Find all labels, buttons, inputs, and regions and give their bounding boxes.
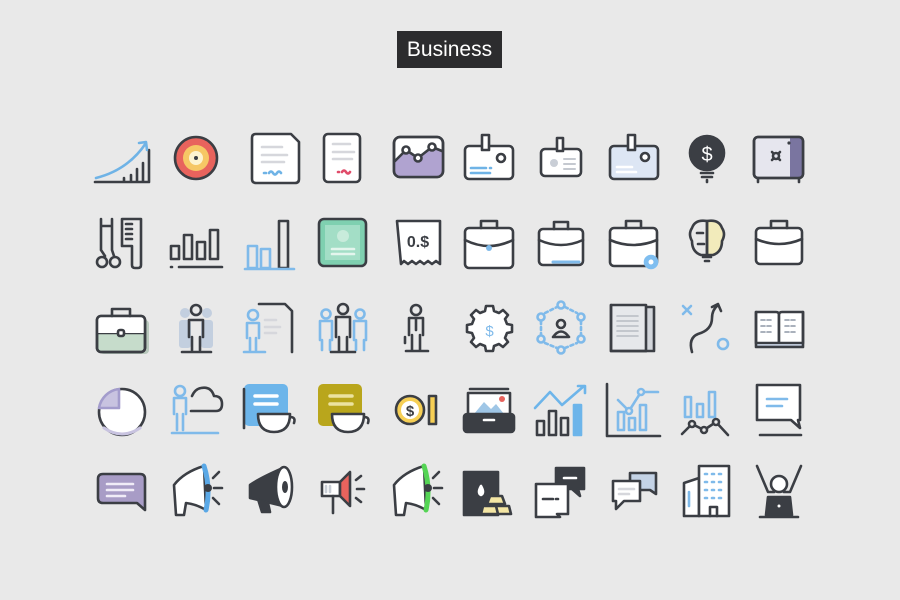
title <box>397 31 502 68</box>
icon: coin ruler: $ <box>406 403 415 420</box>
icon: olive doc cup <box>318 384 368 432</box>
icon: line bar chart <box>607 384 660 436</box>
icon: growth chart <box>95 142 149 182</box>
icon: scissors and comb <box>97 219 141 268</box>
icon: person laptop <box>757 466 801 517</box>
icon: megaphone red <box>322 472 364 513</box>
icon: bar chart blue <box>245 221 294 269</box>
icon: person with document <box>244 304 292 352</box>
icon: pie chart <box>99 389 145 435</box>
icon: briefcase green <box>97 309 149 354</box>
icon: path route <box>683 304 728 352</box>
icon: document red <box>324 134 360 182</box>
icon: gear dollar: $ <box>485 323 494 340</box>
icon: bar chart arrow <box>535 386 585 435</box>
icon: blue doc cup <box>244 384 294 432</box>
icon: area chart card <box>394 137 443 177</box>
icon: megaphone green <box>394 466 442 515</box>
icon: document blue <box>252 134 299 183</box>
icon: id card 2 <box>541 138 581 176</box>
icon: bar chart outline <box>171 230 222 267</box>
icon: photo tray <box>464 389 514 432</box>
icon: purple chat <box>98 474 145 510</box>
icon: open book <box>756 312 803 348</box>
icon: receipt <box>397 221 440 264</box>
icon: businessman <box>405 305 428 351</box>
icon: documents stack <box>611 305 654 351</box>
icon: brain <box>690 221 724 261</box>
icon: briefcase 2 <box>539 222 583 265</box>
icon: network <box>538 302 584 354</box>
icon: id card 1 <box>465 135 513 179</box>
icon: chat bubbles dark white <box>536 468 584 517</box>
icon: receipt: 0.$ <box>407 234 429 251</box>
icon: megaphone dark <box>250 467 292 512</box>
icon: megaphone blue <box>174 466 222 515</box>
icon: id card 3 <box>610 135 658 179</box>
title: Business <box>407 38 492 61</box>
icon: target <box>175 137 217 179</box>
icon: team <box>320 304 366 352</box>
icon: gear dollar <box>467 306 512 351</box>
icon: safe <box>754 137 803 182</box>
icon: oil barrel and gold <box>464 472 511 515</box>
icon: money idea bulb <box>690 136 724 182</box>
icon: person with group <box>179 305 213 352</box>
icon: briefcase 1 <box>465 221 513 268</box>
icon: money idea bulb: $ <box>701 144 713 166</box>
icon: briefcase 3 <box>610 221 657 268</box>
icon: coin ruler <box>396 396 436 424</box>
icon: chat bubbles light <box>613 473 656 509</box>
icon: person cloud <box>172 386 222 433</box>
icon: bars dots <box>682 392 728 435</box>
icon: briefcase 4 <box>756 221 802 264</box>
icon: buildings <box>684 466 729 516</box>
icon: chat outline <box>757 385 801 435</box>
icon: certificate <box>319 219 366 266</box>
